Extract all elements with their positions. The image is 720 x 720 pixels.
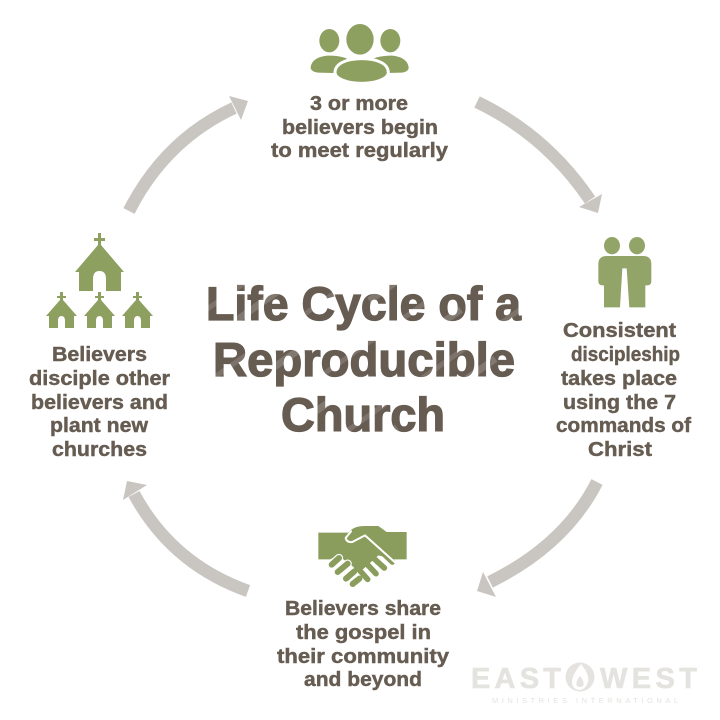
icon: handshake (318, 526, 407, 584)
arrow: discipleship to sharing the gospel (477, 482, 597, 597)
step text: believers begin to meet: 3 or more (310, 93, 408, 115)
step text: believers disciple and plant: disciple other (29, 368, 170, 390)
step text: consistent discipleship: Christ (588, 439, 652, 461)
large church (75, 233, 124, 291)
step text: believers disciple and plant (29, 344, 170, 461)
logo: East West Ministries International: MINISTRIES INTERNATIONAL (492, 696, 678, 705)
step text: sharing the gospel: the gospel in (296, 622, 431, 644)
step text: believers disciple and plant: plant new (50, 415, 148, 437)
icon: flame emblem (566, 662, 594, 692)
title (206, 277, 522, 441)
title: Reproducible (213, 333, 515, 386)
logo: East West Ministries International: WEST (600, 663, 697, 695)
step text: consistent discipleship: commands of (556, 415, 691, 437)
icon: group of three people (311, 24, 409, 83)
step text: consistent discipleship: Consistent (563, 320, 676, 342)
step text: believers begin to meet: believers begin (282, 117, 438, 139)
step text: consistent discipleship: using the 7 (563, 392, 676, 414)
title: Life Cycle of a (206, 277, 522, 330)
logo: East West Ministries International: EAST (471, 663, 561, 695)
icon: four churches (46, 233, 153, 328)
icon: two people side by side (598, 237, 651, 307)
step text: believers disciple and plant: Believers (52, 344, 147, 366)
arrow: believers to discipleship (477, 102, 602, 213)
step text: sharing the gospel (277, 598, 450, 691)
step text: consistent discipleship (556, 320, 691, 461)
step text: believers begin to meet (271, 93, 449, 162)
step text: believers begin to meet: to meet regularly (271, 140, 449, 162)
title: Church (281, 388, 445, 441)
arrow: churches to new believers (129, 96, 248, 211)
step text: believers disciple and plant: churches (52, 439, 147, 461)
step text: consistent discipleship: discipleship (571, 344, 680, 366)
arrow: sharing the gospel to planting churches (123, 481, 248, 591)
step text: believers disciple and plant: believers and (31, 392, 168, 414)
small church right (122, 292, 153, 328)
step text: sharing the gospel: their community (277, 646, 450, 668)
small church middle (84, 292, 115, 328)
step text: sharing the gospel: Believers share (285, 598, 441, 620)
logo: East West Ministries International (471, 662, 697, 705)
small church left (46, 292, 77, 328)
step text: sharing the gospel: and beyond (304, 669, 422, 691)
step text: consistent discipleship: takes place (561, 368, 677, 390)
